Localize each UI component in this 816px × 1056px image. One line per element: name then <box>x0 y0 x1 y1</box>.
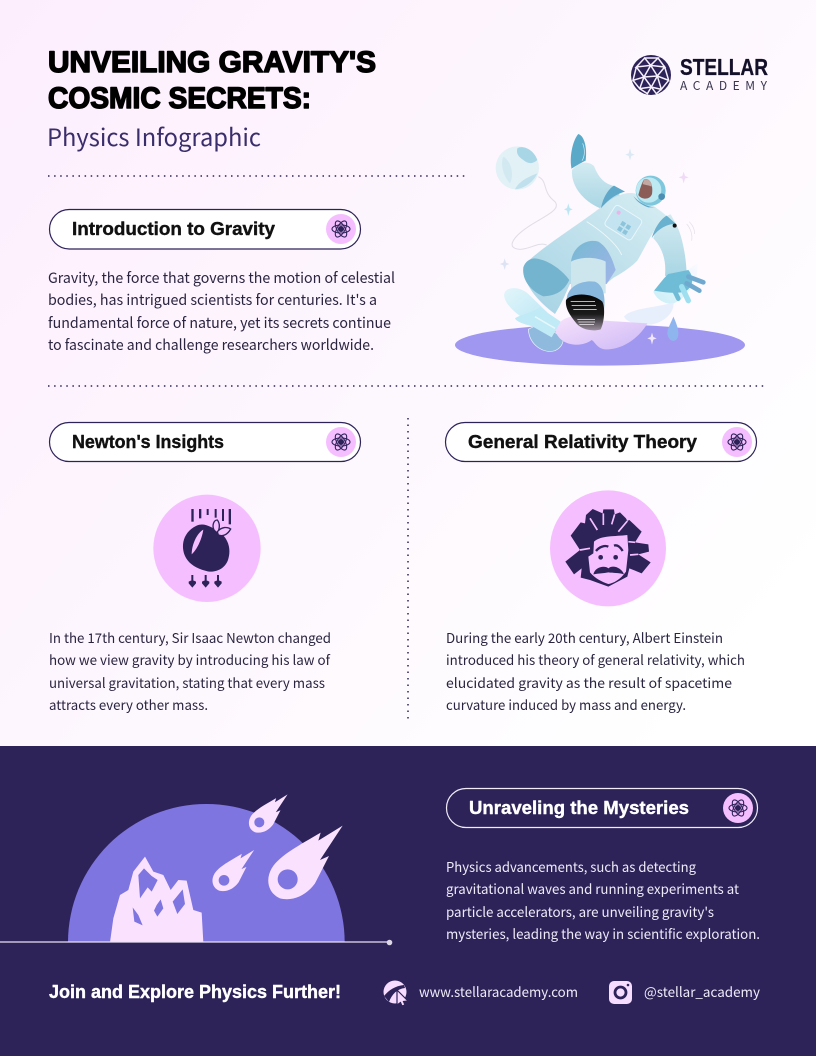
Einstein text: introduced his theory of general relativity, which <box>446 649 745 669</box>
heading pill: Introduction to Gravity <box>72 218 276 239</box>
section: Newton's Insights <box>49 422 360 714</box>
illustration: meteors and rock <box>68 794 345 942</box>
mysteries text: mysteries, leading the way in scientific exploration. <box>446 923 760 943</box>
Newton text <box>49 627 331 714</box>
heading pill <box>446 422 756 462</box>
tether <box>512 177 556 249</box>
logo: Stellar Academy <box>631 54 768 95</box>
social handle: @stellar_academy <box>644 981 760 1001</box>
Einstein text <box>446 627 745 714</box>
planet <box>496 146 539 190</box>
shoulder patch <box>601 186 625 208</box>
heading pill <box>50 422 360 462</box>
title: UNVEILING GRAVITY'S <box>48 46 376 79</box>
Newton text: universal gravitation, stating that every mass <box>49 672 325 692</box>
section: General Relativity Theory <box>446 422 756 714</box>
Einstein text: elucidated gravity as the result of spacetime <box>446 672 732 692</box>
raised arm <box>572 163 627 209</box>
suit seams <box>587 222 622 255</box>
horizon line <box>0 940 392 945</box>
drop <box>667 317 678 341</box>
left thigh shading <box>523 258 569 296</box>
foot <box>528 323 563 351</box>
Einstein text: curvature induced by mass and energy. <box>446 694 686 714</box>
heading pill <box>50 210 360 249</box>
social link <box>609 981 760 1004</box>
motion lines <box>687 222 694 241</box>
logo wordmark: STELLAR <box>680 54 768 80</box>
hand glow <box>653 263 698 304</box>
section: Unraveling the Mysteries <box>446 788 760 943</box>
logo icon: geodesic globe <box>631 55 671 95</box>
boot sole <box>566 295 604 330</box>
heading pill: General Relativity Theory <box>468 431 698 452</box>
chest panel <box>604 204 643 241</box>
pink cloud <box>555 316 647 349</box>
Newton text: In the 17th century, Sir Isaac Newton changed <box>49 627 331 647</box>
mysteries text: Physics advancements, such as detecting <box>446 856 696 876</box>
icon: falling apple <box>153 495 261 602</box>
knee <box>571 241 616 287</box>
shoe cuff <box>515 308 561 337</box>
Einstein text: During the early 20th century, Albert Einstein <box>446 627 723 647</box>
small meteor <box>249 794 288 833</box>
intro text: bodies, has intrigued scientists for centuries. It's a <box>48 289 377 310</box>
intro text: fundamental force of nature, yet its secrets continue <box>48 312 391 333</box>
right arm <box>653 214 687 277</box>
dark footer panel <box>0 746 816 1056</box>
sparkles <box>500 148 689 345</box>
right pale blob <box>624 303 673 325</box>
astronaut illustration <box>455 134 745 366</box>
open hand <box>654 270 703 301</box>
planet semicircle <box>68 804 345 942</box>
website link <box>384 980 578 1006</box>
title: COSMIC SECRETS: <box>48 82 311 115</box>
lower leg <box>571 258 606 293</box>
heading pill: Unraveling the Mysteries <box>469 797 689 818</box>
heading pill <box>446 788 758 828</box>
intro text: Gravity, the force that governs the motion of celestial <box>48 267 395 288</box>
large meteor <box>268 826 343 899</box>
icon: globe cursor <box>384 980 408 1006</box>
boot <box>567 281 605 310</box>
helmet <box>633 176 666 207</box>
dotted divider <box>48 175 466 177</box>
medium meteor <box>212 850 254 891</box>
website text: www.stellaracademy.com <box>419 981 578 1001</box>
rock <box>110 857 203 942</box>
mysteries text: gravitational waves and running experiments at <box>446 878 739 898</box>
call to action: Join and Explore Physics Further! <box>49 982 341 1002</box>
mysteries text: particle accelerators, are unveiling gravity's <box>446 901 714 921</box>
heading pill: Newton's Insights <box>72 431 224 452</box>
raised hand <box>571 134 586 169</box>
icon: Einstein <box>550 490 666 606</box>
subtitle: Physics Infographic <box>47 118 261 153</box>
right shoulder patch <box>652 216 676 238</box>
icon: instagram <box>609 981 632 1004</box>
floor ellipse <box>455 324 745 366</box>
title <box>48 46 376 115</box>
intro text: to fascinate and challenge researchers worldwide. <box>48 334 374 355</box>
intro text <box>48 267 395 355</box>
Newton text: how we view gravity by introducing his law of <box>49 649 331 669</box>
page background <box>0 0 816 746</box>
logo subtitle: ACADEMY <box>680 77 768 94</box>
mysteries text <box>446 856 760 943</box>
Newton text: attracts every other mass. <box>49 694 208 714</box>
torso <box>523 193 667 314</box>
pale foot glow <box>504 288 552 327</box>
section: Introduction to Gravity <box>48 210 395 355</box>
